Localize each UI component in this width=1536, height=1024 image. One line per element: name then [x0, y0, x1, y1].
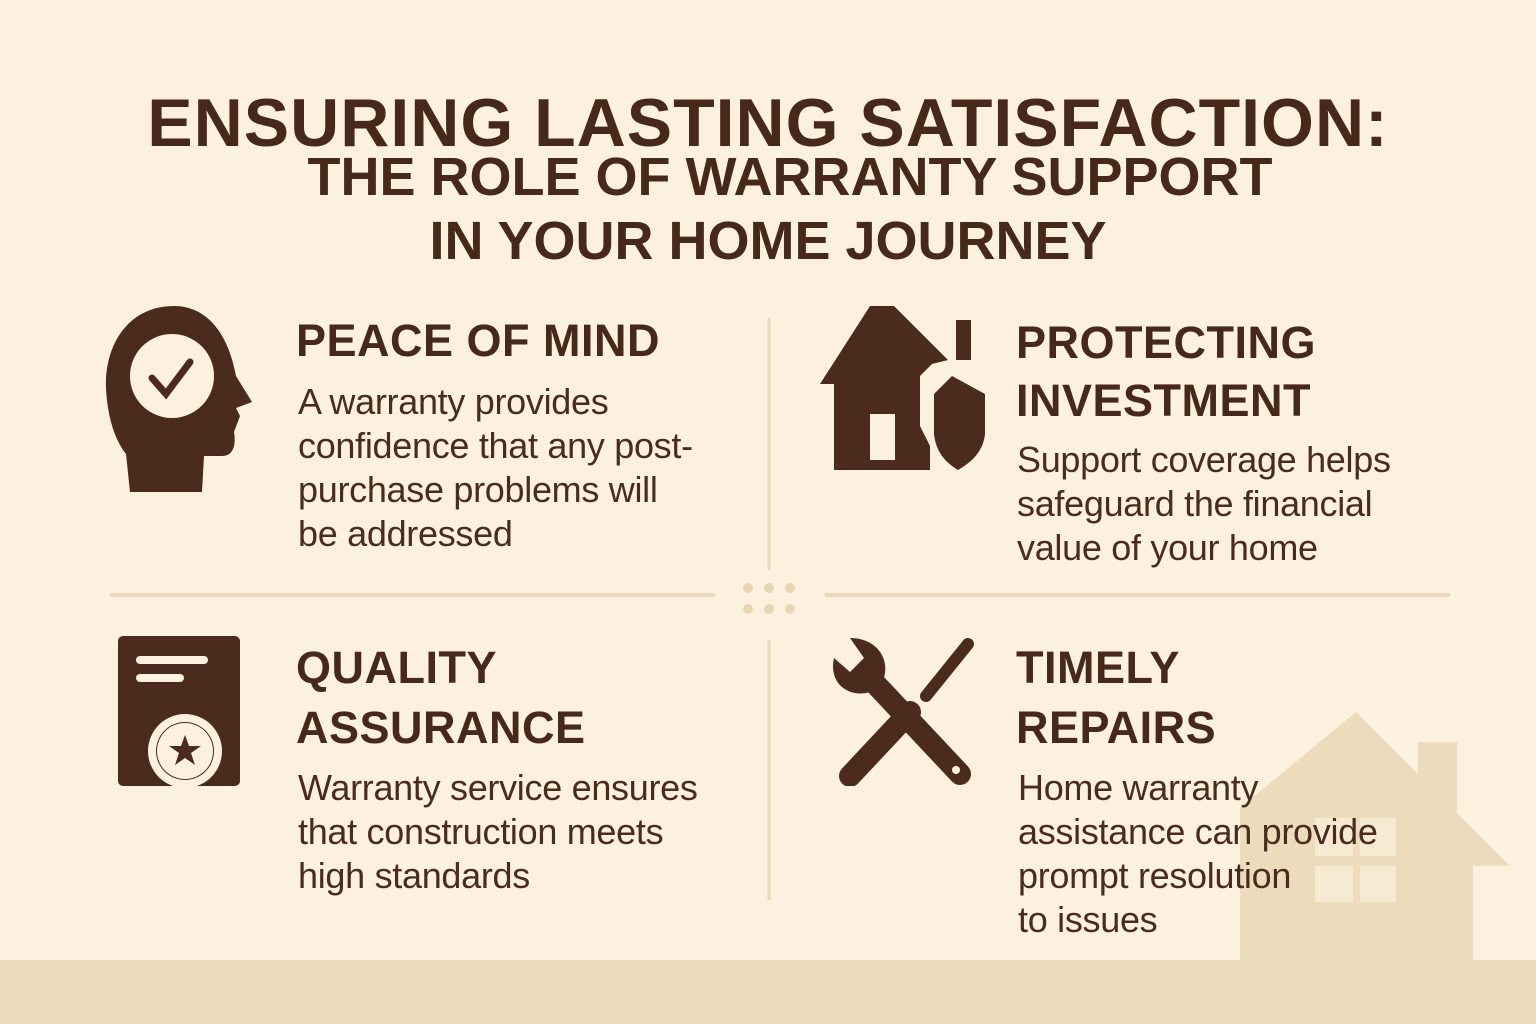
- heading: [296, 642, 586, 753]
- text: Warranty service ensures: [298, 767, 698, 808]
- panel: peace of mind: [106, 306, 693, 554]
- text: prompt resolution: [1018, 855, 1291, 896]
- heading: INVESTMENT: [1016, 375, 1311, 426]
- heading: QUALITY: [296, 642, 497, 693]
- text: A warranty provides: [298, 381, 608, 422]
- text: purchase problems will: [298, 469, 658, 510]
- icon: head with check: [106, 306, 252, 492]
- text: to issues: [1018, 899, 1157, 940]
- heading: PEACE OF MIND: [296, 315, 660, 366]
- heading: PROTECTING: [1016, 317, 1316, 368]
- text: assistance can provide: [1018, 811, 1378, 852]
- heading: [1016, 642, 1216, 753]
- title: [147, 85, 1389, 271]
- text: safeguard the financial: [1017, 483, 1372, 524]
- icon: wrench and screwdriver: [833, 638, 974, 786]
- panel: protecting investment: [820, 306, 1391, 568]
- text: [1018, 767, 1378, 940]
- panel: quality assurance: [118, 636, 698, 896]
- text: confidence that any post-: [298, 425, 693, 466]
- heading: TIMELY: [1016, 642, 1180, 693]
- title: IN YOUR HOME JOURNEY: [429, 211, 1107, 271]
- text: value of your home: [1017, 527, 1318, 568]
- text: [1017, 439, 1391, 568]
- text: that construction meets: [298, 811, 663, 852]
- icon: house with shield: [820, 306, 985, 470]
- icon: document with badge: [118, 636, 240, 786]
- text: Home warranty: [1018, 767, 1258, 808]
- heading: ASSURANCE: [296, 702, 586, 753]
- text: be addressed: [298, 513, 513, 554]
- text: [298, 767, 698, 896]
- text: Support coverage helps: [1017, 439, 1391, 480]
- heading: REPAIRS: [1016, 702, 1216, 753]
- text: [298, 381, 693, 554]
- title: ENSURING LASTING SATISFACTION:: [147, 85, 1389, 161]
- text: high standards: [298, 855, 530, 896]
- panel: timely repairs: [833, 638, 1378, 940]
- heading: [1016, 317, 1316, 426]
- title: THE ROLE OF WARRANTY SUPPORT: [307, 147, 1273, 207]
